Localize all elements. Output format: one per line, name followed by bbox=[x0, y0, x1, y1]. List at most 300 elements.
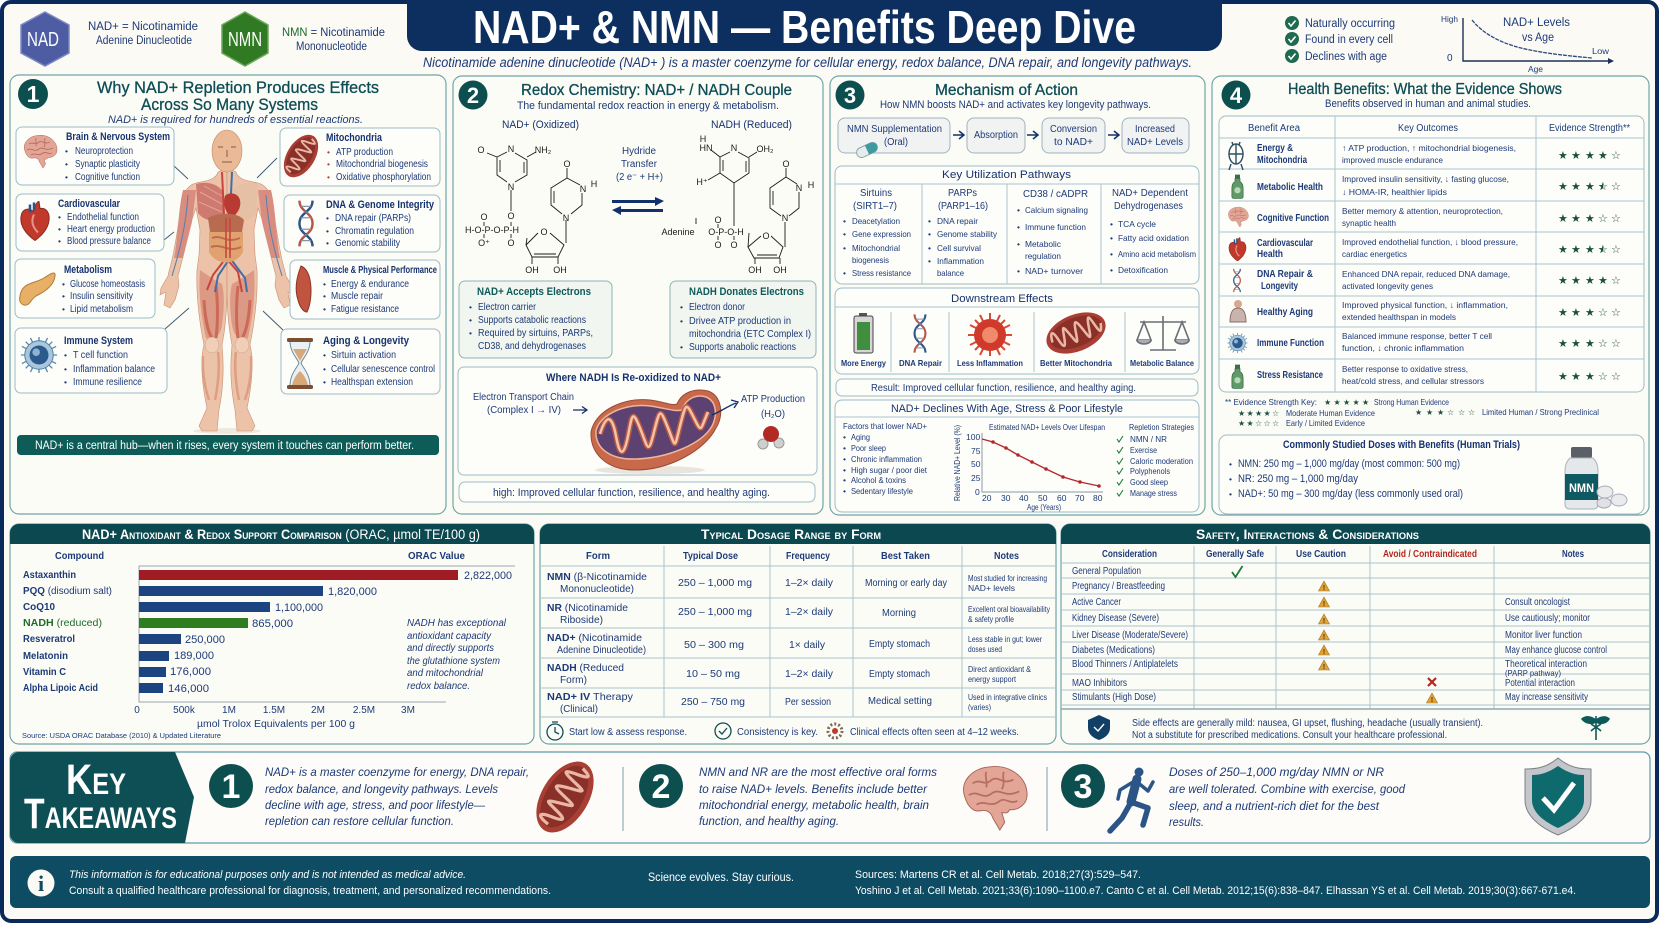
icon: pancreas bbox=[20, 273, 55, 305]
icon: DNA bbox=[915, 314, 925, 353]
box: metabolism: • bbox=[62, 304, 65, 314]
box: muscle and physical performance: Energy & endurance bbox=[331, 279, 409, 290]
row: stress resistance: ★★★☆☆ bbox=[1558, 370, 1621, 383]
table: key utilization pathways: • bbox=[1017, 205, 1020, 215]
molecule: NAD+ oxidized: O bbox=[563, 159, 571, 169]
row: NADH: energy support bbox=[968, 674, 1017, 684]
line chart: NAD+ over lifespan: Relative NAD+ Level (%) bbox=[952, 425, 962, 501]
mini chart: NAD+ levels vs age: NAD+ Levels bbox=[1503, 17, 1570, 29]
label: hydride transfer: (2 e⁻ + H+) bbox=[616, 172, 663, 183]
table: key utilization pathways: • bbox=[1110, 233, 1113, 243]
box: immune system bbox=[15, 328, 167, 393]
heading: Benefits observed in human and animal studies. bbox=[1325, 98, 1531, 110]
row: NAD+ IV: Per session bbox=[785, 697, 831, 708]
molecule: NAD+ oxidized: O bbox=[507, 211, 515, 221]
label: hydride transfer: Transfer bbox=[621, 159, 658, 170]
box: commonly studied doses: Commonly Studied Doses with Benefits (Human Trials) bbox=[1283, 439, 1520, 451]
line chart: NAD+ over lifespan: 0 bbox=[975, 487, 980, 497]
row: NMN: Mononucleotide) bbox=[560, 584, 634, 595]
table: benefits and evidence bbox=[1219, 116, 1644, 392]
box: metabolism: • bbox=[62, 291, 65, 301]
list: factors that lower NAD+: High sugar / poor diet bbox=[851, 465, 928, 475]
row: metabolic health: Metabolic Health bbox=[1257, 182, 1323, 193]
table: key utilization pathways: Amino acid metabolism bbox=[1118, 249, 1196, 259]
box: immune system: T cell function bbox=[73, 350, 128, 361]
heading: How NMN boosts NAD+ and activates key longevity pathways. bbox=[880, 99, 1151, 111]
footer: disclaimer and sources bbox=[10, 856, 1650, 908]
table: key utilization pathways: Fatty acid oxidation bbox=[1118, 233, 1189, 243]
box: where NADH is re-oxidized bbox=[458, 367, 817, 475]
compound names: Melatonin bbox=[23, 651, 68, 662]
evidence strength key: Strong Human Evidence bbox=[1374, 397, 1449, 407]
footer tips: Consistency is key. bbox=[737, 727, 818, 738]
row: DNA repair and longevity bbox=[1234, 269, 1621, 292]
takeaway 3: sleep, and a nutrient-rich diet for the best bbox=[1169, 799, 1380, 813]
molecule: NAD+ oxidized: N bbox=[563, 213, 569, 223]
table: key utilization pathways: Dehydrogenases bbox=[1114, 201, 1183, 212]
takeaway 3: are well tolerated. Combine with exercise, good bbox=[1169, 782, 1405, 796]
header: key facts checklist: Found in every cell bbox=[1305, 34, 1393, 46]
column headers: Form bbox=[586, 551, 610, 562]
row: NMN bbox=[547, 572, 1047, 595]
box: commonly studied doses: • bbox=[1229, 474, 1232, 484]
box: DNA and genome integrity: • bbox=[326, 238, 329, 248]
box: metabolism: Lipid metabolism bbox=[70, 304, 133, 315]
table: key utilization pathways: Cell survival bbox=[937, 243, 981, 253]
row: DNA repair and longevity: ★★★★☆ bbox=[1558, 274, 1621, 287]
section: downstream effects: Metabolic Balance bbox=[1130, 358, 1194, 368]
header bar: Typical Dosage Range by Form bbox=[701, 527, 881, 542]
icon: safe check bbox=[1232, 566, 1242, 577]
number badge 1 bbox=[18, 79, 48, 109]
box: mitochondria: • bbox=[327, 147, 330, 157]
table: key utilization pathways bbox=[835, 166, 1199, 284]
row: cardiovascular health: ★ bbox=[1598, 243, 1608, 256]
bar values: 1,100,000 bbox=[275, 602, 323, 614]
line chart: NAD+ over lifespan: 30 bbox=[1001, 493, 1011, 503]
row labels: Stimulants (High Dose) bbox=[1072, 692, 1156, 703]
row: immune function: function, ↓ chronic inflammation bbox=[1342, 343, 1464, 353]
box: where NADH is re-oxidized: Where NADH Is Re-oxidized to NAD+ bbox=[546, 372, 721, 384]
row: immune function: ★★★☆☆ bbox=[1558, 337, 1621, 350]
box: NADH donates electrons: Supports anabolic reactions bbox=[689, 342, 796, 353]
box: aging and longevity: Aging & Longevity bbox=[323, 335, 410, 347]
table: key utilization pathways: • bbox=[928, 216, 931, 226]
row: NAD+ IV: 250 – 750 mg bbox=[681, 697, 745, 708]
note: NADH antioxidant capacity: and directly supports bbox=[407, 643, 494, 654]
box: brain and nervous system: • bbox=[65, 159, 68, 169]
table: key utilization pathways: Key Utilization Pathways bbox=[942, 169, 1072, 181]
flow: NMN to NAD+: (Oral) bbox=[884, 137, 908, 148]
box: NADH donates electrons: mitochondria (ETC Complex I) bbox=[689, 329, 811, 340]
panel: dosage table bbox=[540, 524, 1056, 744]
axis tick labels: 1M bbox=[222, 705, 236, 716]
icon: contraindicated X bbox=[1428, 678, 1436, 686]
row: NAD+ IV bbox=[547, 692, 1047, 715]
row: energy and mitochondria: ★★★★☆ bbox=[1558, 149, 1621, 162]
box: DNA and genome integrity bbox=[284, 195, 440, 252]
footer tips: Start low & assess response. bbox=[569, 727, 687, 738]
table: key utilization pathways: • bbox=[928, 243, 931, 253]
box: cardiovascular: Blood pressure balance bbox=[67, 236, 151, 247]
evidence strength key: Early / Limited Evidence bbox=[1286, 418, 1365, 428]
icon: heart bbox=[21, 202, 49, 240]
caution icons: ! bbox=[1323, 616, 1325, 625]
row: metabolic health: ★ bbox=[1598, 180, 1608, 193]
evidence strength key: Limited Human / Strong Preclinical bbox=[1482, 407, 1599, 417]
note: NADH antioxidant capacity: antioxidant capacity bbox=[407, 631, 492, 642]
callout banner bbox=[17, 435, 439, 455]
bar values bbox=[168, 570, 512, 695]
table: key utilization pathways: • bbox=[928, 229, 931, 239]
table: key utilization pathways: • bbox=[1017, 239, 1020, 249]
row: NMN: 250 – 1,000 mg bbox=[678, 578, 752, 589]
row: NMN: NMN (β-Nicotinamide bbox=[547, 572, 647, 583]
box: where NADH is re-oxidized: ATP Production bbox=[741, 394, 805, 405]
flow: NMN to NAD+: NMN Supplementation bbox=[847, 124, 942, 135]
takeaway 2: function, and healthy aging. bbox=[699, 814, 839, 828]
row: NADH: Empty stomach bbox=[869, 669, 930, 680]
icon: info bbox=[28, 870, 54, 896]
text: side effects note bbox=[1132, 718, 1483, 741]
result strip: high: Improved cellular function, resilience, and healthy aging. bbox=[493, 487, 770, 499]
bar values: 189,000 bbox=[174, 650, 214, 662]
row: NR: Riboside) bbox=[560, 615, 603, 626]
box: NAD+ accepts electrons: Electron carrier bbox=[478, 302, 537, 313]
caution icons: ! bbox=[1323, 583, 1325, 592]
table: key utilization pathways: • bbox=[843, 229, 846, 239]
number badge 4: 4 bbox=[1230, 83, 1243, 108]
molecule: NADH reduced: N bbox=[796, 183, 802, 193]
icon: runner bbox=[1110, 768, 1153, 831]
list: factors that lower NAD+: • bbox=[843, 432, 846, 442]
row: NMN: 1–2× daily bbox=[785, 578, 833, 589]
box: aging and longevity: Sirtuin activation bbox=[331, 350, 396, 361]
row: cardiovascular health: cardiac energetics bbox=[1342, 249, 1407, 259]
text: side effects note: Not a substitute for prescribed medications. Consult your healthcare professional. bbox=[1132, 730, 1447, 741]
label: hydride transfer bbox=[616, 146, 663, 183]
box: DNA and genome integrity: • bbox=[326, 213, 329, 223]
notes column: (PARP pathway) bbox=[1505, 668, 1561, 678]
row: metabolic health bbox=[1232, 174, 1621, 198]
section: NAD+ declines: NAD+ Declines With Age, Stress & Poor Lifestyle bbox=[891, 403, 1123, 415]
table: benefits and evidence: Benefit Area bbox=[1248, 123, 1300, 134]
row labels: Blood Thinners / Antiplatelets bbox=[1072, 659, 1178, 670]
list: repletion strategies: Polyphenols bbox=[1130, 466, 1170, 476]
flow: NMN to NAD+: Conversion bbox=[1050, 124, 1097, 135]
heading: Mechanism of Action bbox=[935, 82, 1078, 99]
row: NAD+ bbox=[547, 633, 1042, 656]
icon: balance scale bbox=[1137, 316, 1189, 350]
table: key utilization pathways: • bbox=[1017, 266, 1020, 276]
number badge 4 bbox=[1222, 80, 1250, 110]
row: NAD+: 50 – 300 mg bbox=[684, 640, 744, 651]
heading bbox=[1288, 81, 1562, 110]
box: muscle and physical performance: Fatigue resistance bbox=[331, 304, 399, 315]
header: key facts checklist: Naturally occurring bbox=[1305, 18, 1395, 30]
box: immune system: • bbox=[64, 364, 67, 374]
box: metabolism: Insulin sensitivity bbox=[70, 291, 133, 302]
molecule: NADH reduced: N bbox=[731, 143, 737, 153]
result strip bbox=[836, 379, 1198, 396]
row: stress resistance bbox=[1232, 364, 1621, 388]
row labels: Liver Disease (Moderate/Severe) bbox=[1072, 630, 1188, 641]
section: NAD+ declines bbox=[835, 400, 1199, 512]
row labels: Active Cancer bbox=[1072, 597, 1122, 608]
molecule: NADH reduced bbox=[661, 119, 814, 275]
table: benefits and evidence: Key Outcomes bbox=[1398, 123, 1458, 134]
icon: battery bbox=[854, 313, 873, 353]
table: key utilization pathways: CD38 / cADPR bbox=[1023, 189, 1088, 200]
molecule: NADH reduced: O bbox=[782, 159, 790, 169]
box: muscle and physical performance: • bbox=[323, 279, 326, 289]
note: NADH antioxidant capacity: and mitochondrial bbox=[407, 668, 484, 679]
box: muscle and physical performance: • bbox=[323, 304, 326, 314]
table: benefits and evidence: Evidence Strength** bbox=[1549, 123, 1630, 134]
table: key utilization pathways: Detoxification bbox=[1118, 265, 1168, 275]
table: key utilization pathways: • bbox=[1110, 265, 1113, 275]
takeaway 2: to raise NAD+ levels. Benefits include better bbox=[699, 782, 928, 796]
heading: The fundamental redox reaction in energy & metabolism. bbox=[517, 100, 779, 112]
panel 4: health benefits bbox=[1212, 76, 1649, 515]
row: DNA repair and longevity: Longevity bbox=[1261, 281, 1298, 292]
flow: NMN to NAD+ bbox=[838, 118, 1189, 159]
axes bbox=[139, 566, 515, 702]
compound names: Astaxanthin bbox=[23, 570, 76, 581]
takeaway 3: Doses of 250–1,000 mg/day NMN or NR bbox=[1169, 765, 1384, 779]
note: NADH antioxidant capacity bbox=[407, 618, 507, 692]
box: commonly studied doses: • bbox=[1229, 459, 1232, 469]
icon: shield bbox=[1088, 715, 1110, 740]
row: NADH: Direct antioxidant & bbox=[968, 664, 1031, 674]
row: NADH: NADH (Reduced bbox=[547, 663, 624, 674]
box: brain and nervous system: Neuroprotection bbox=[75, 146, 133, 157]
list: factors that lower NAD+: Sedentary lifestyle bbox=[851, 486, 913, 496]
list: repletion strategies: Good sleep bbox=[1130, 477, 1168, 487]
section: key takeaways bbox=[10, 751, 1650, 843]
compound names: Alpha Lipoic Acid bbox=[23, 683, 98, 694]
box: NADH donates electrons: • bbox=[680, 316, 683, 326]
mini chart: NAD+ levels vs age: High bbox=[1441, 14, 1458, 24]
number badge 3 bbox=[836, 80, 864, 110]
heading: Across So Many Systems bbox=[141, 95, 318, 114]
table: key utilization pathways: Gene expression bbox=[852, 229, 911, 239]
box: NAD+ accepts electrons: Supports catabolic reactions bbox=[478, 315, 586, 326]
molecule: NAD+ oxidized: OH bbox=[525, 265, 539, 275]
box: DNA and genome integrity: DNA repair (PARPs) bbox=[335, 213, 411, 224]
icon: NMN hexagon: NMN bbox=[228, 29, 262, 51]
table: key utilization pathways: • bbox=[843, 243, 846, 253]
table: key utilization pathways: TCA cycle bbox=[1118, 219, 1156, 229]
row: energy and mitochondria: Energy & bbox=[1257, 143, 1293, 154]
box: aging and longevity bbox=[281, 329, 440, 394]
takeaway 3: results. bbox=[1169, 815, 1204, 829]
row: NADH: 1–2× daily bbox=[785, 669, 833, 680]
title banner: NAD+ & NMN — Benefits Deep Dive bbox=[473, 1, 1136, 53]
compound names: PQQ (disodium salt) bbox=[23, 586, 112, 597]
icon: water molecule bbox=[758, 426, 784, 449]
table: key utilization pathways: Stress resistance bbox=[852, 268, 911, 278]
icon: NMN bottle and pills bbox=[1565, 447, 1627, 509]
box: NADH donates electrons: • bbox=[680, 302, 683, 312]
icon: immune cell bbox=[21, 337, 57, 373]
box: brain and nervous system: • bbox=[65, 172, 68, 182]
icon: mitochondrion bbox=[277, 129, 325, 183]
box: aging and longevity: Cellular senescence control bbox=[331, 364, 435, 375]
axis tick labels bbox=[134, 705, 415, 716]
column headers: Notes bbox=[994, 551, 1019, 562]
molecule: NAD+ oxidized: N bbox=[580, 184, 586, 194]
notes column: Monitor liver function bbox=[1505, 630, 1582, 641]
row: NAD+ IV: (varies) bbox=[968, 702, 991, 712]
row labels: General Population bbox=[1072, 566, 1141, 577]
heading: NAD+ is required for hundreds of essential reactions. bbox=[108, 114, 363, 126]
takeaway 2: NMN and NR are the most effective oral forms bbox=[699, 765, 937, 779]
table: key utilization pathways: balance bbox=[937, 268, 964, 278]
axis tick labels: 3M bbox=[401, 705, 415, 716]
line chart: NAD+ over lifespan: 60 bbox=[1057, 493, 1067, 503]
icon: mitochondrion bbox=[1040, 304, 1112, 362]
row: NAD+: doses used bbox=[968, 644, 1002, 654]
box: immune system: • bbox=[64, 350, 67, 360]
bar values: 146,000 bbox=[168, 683, 209, 695]
section: downstream effects: Less Inflammation bbox=[957, 358, 1023, 368]
icon: consistency check bbox=[715, 723, 731, 739]
notes column: Use cautiously; monitor bbox=[1505, 613, 1591, 624]
header bar bbox=[10, 524, 534, 544]
molecule: NAD+ oxidized: N bbox=[508, 182, 514, 192]
compound names: Resveratrol bbox=[23, 634, 75, 645]
row: cardiovascular health: ★★★☆☆ bbox=[1558, 243, 1621, 256]
header: key facts checklist bbox=[1285, 16, 1395, 63]
section: downstream effects: Downstream Effects bbox=[951, 293, 1054, 305]
icon: shield check bbox=[1525, 758, 1591, 835]
row: cognitive function: ★★★☆☆ bbox=[1558, 212, 1621, 225]
table: key utilization pathways: Metabolic bbox=[1025, 239, 1062, 249]
table: key utilization pathways: • bbox=[843, 216, 846, 226]
row: cardiovascular health: Cardiovascular bbox=[1257, 238, 1313, 249]
molecule: NAD+ oxidized: NH₂ bbox=[535, 145, 552, 155]
row: NADH: Form) bbox=[560, 675, 587, 686]
box: brain and nervous system: Synaptic plasticity bbox=[75, 159, 140, 170]
molecule: NADH reduced: OH bbox=[748, 265, 762, 275]
notes column: May increase sensitivity bbox=[1505, 692, 1588, 703]
box: DNA and genome integrity: Genomic stability bbox=[335, 238, 400, 249]
box: metabolism: Glucose homeostasis bbox=[70, 279, 145, 290]
panel: safety table bbox=[1061, 524, 1650, 744]
line chart: NAD+ over lifespan: 50 bbox=[971, 459, 981, 469]
row labels bbox=[1072, 566, 1188, 703]
column labels: ORAC Value bbox=[408, 551, 465, 562]
header: NAD+ and NMN definitions bbox=[21, 12, 385, 66]
table: key utilization pathways: NAD+ turnover bbox=[1025, 266, 1083, 276]
list: factors that lower NAD+: Alcohol & toxins bbox=[851, 475, 906, 485]
box: metabolism: Metabolism bbox=[64, 264, 112, 276]
icon: muscle bbox=[296, 266, 311, 312]
row: NR: 250 – 1,000 mg bbox=[678, 607, 752, 618]
row: cardiovascular health bbox=[1229, 237, 1621, 261]
column headers: Use Caution bbox=[1296, 549, 1346, 560]
box: immune system: Immune System bbox=[64, 335, 133, 347]
compound names: NADH (reduced) bbox=[23, 618, 102, 629]
takeaway 2: 2 bbox=[652, 768, 670, 806]
grid bbox=[1061, 546, 1650, 709]
molecule: NAD+ oxidized: O bbox=[507, 238, 515, 248]
molecule: NAD+ oxidized: O bbox=[540, 227, 548, 237]
row: NAD+ IV: Medical setting bbox=[868, 696, 932, 707]
heading bbox=[97, 78, 379, 126]
row: NR: Morning bbox=[882, 608, 916, 619]
table: key utilization pathways: Deacetylation bbox=[852, 216, 900, 226]
row: NMN: NAD+ levels bbox=[968, 583, 1015, 593]
list: factors that lower NAD+: Poor sleep bbox=[851, 443, 886, 453]
row: cardiovascular health: Improved endothelial function, ↓ blood pressure, bbox=[1342, 237, 1518, 247]
box: brain and nervous system: • bbox=[65, 146, 68, 156]
table: key utilization pathways: (SIRT1–7) bbox=[853, 201, 897, 212]
blue-red abdominal vessels bbox=[226, 218, 230, 258]
row: stress resistance: Better response to oxidative stress, bbox=[1342, 364, 1468, 374]
list: repletion strategies: Caloric moderation bbox=[1130, 456, 1193, 466]
box: NAD+ accepts electrons: • bbox=[469, 315, 472, 325]
result strip bbox=[459, 482, 815, 502]
caution icons: ! bbox=[1431, 695, 1433, 704]
box: NADH donates electrons: • bbox=[680, 342, 683, 352]
number badge 2 bbox=[458, 80, 488, 110]
molecule: NAD+ oxidized: O⁺ bbox=[478, 238, 490, 248]
list: factors that lower NAD+: • bbox=[843, 486, 846, 496]
heading: Health Benefits: What the Evidence Shows bbox=[1288, 81, 1562, 98]
arrow: to ATP production bbox=[712, 400, 738, 415]
row: cognitive function bbox=[1228, 206, 1621, 228]
table: key utilization pathways: • bbox=[928, 256, 931, 266]
header bar bbox=[540, 524, 1056, 544]
box: muscle and physical performance bbox=[290, 260, 440, 319]
text: sources: Sources: Martens CR et al. Cell Metab. 2018;27(3):529–547. bbox=[855, 869, 1141, 881]
evidence strength key: ★★☆☆☆ bbox=[1238, 419, 1279, 428]
source: Source: USDA ORAC Database (2010) & Updated Literature bbox=[22, 731, 221, 740]
row: NADH bbox=[547, 663, 1031, 686]
number badge 1: 1 bbox=[27, 81, 40, 107]
text: NAD+ definition: NAD+ = Nicotinamide bbox=[88, 21, 198, 33]
subtitle: Nicotinamide adenine dinucleotide (NAD+ ) is a master coenzyme for cellular energy, redox balance, DNA repair, and longevity pathways. bbox=[423, 55, 1192, 70]
icon: clinical effects bbox=[828, 724, 842, 738]
column headers: Frequency bbox=[786, 551, 830, 562]
molecule: NADH reduced: OH₂ bbox=[756, 144, 774, 154]
box: mitochondria: ATP production bbox=[336, 147, 393, 158]
axis tick labels: 500k bbox=[173, 705, 196, 716]
box: DNA and genome integrity: • bbox=[326, 226, 329, 236]
takeaway 3 bbox=[1061, 764, 1405, 829]
box: mitochondria: Mitochondrial biogenesis bbox=[336, 159, 428, 170]
bar values: 865,000 bbox=[252, 618, 293, 630]
list: factors that lower NAD+: • bbox=[843, 443, 846, 453]
notes column: Theoretical interaction bbox=[1505, 659, 1587, 670]
compound names: CoQ10 bbox=[23, 602, 55, 613]
takeaway 1: NAD+ is a master coenzyme for energy, DNA repair, bbox=[265, 765, 529, 779]
row: NAD+: Less stable in gut; lower bbox=[968, 634, 1042, 644]
list: repletion strategies bbox=[1117, 422, 1194, 498]
table: key utilization pathways: Genome stability bbox=[937, 229, 998, 239]
box: immune system: Immune resilience bbox=[73, 377, 142, 388]
box: NAD+ accepts electrons: • bbox=[469, 328, 472, 338]
box: muscle and physical performance: Muscle & Physical Performance bbox=[323, 265, 437, 276]
molecule: NAD+ oxidized: H bbox=[591, 179, 597, 189]
box: immune system: • bbox=[64, 377, 67, 387]
molecule: NAD+ oxidized: OH bbox=[553, 265, 567, 275]
box: NAD+ accepts electrons: NAD+ Accepts Electrons bbox=[477, 286, 591, 298]
evidence strength key bbox=[1225, 397, 1599, 428]
molecule: NADH reduced: H⁺ bbox=[696, 177, 708, 187]
